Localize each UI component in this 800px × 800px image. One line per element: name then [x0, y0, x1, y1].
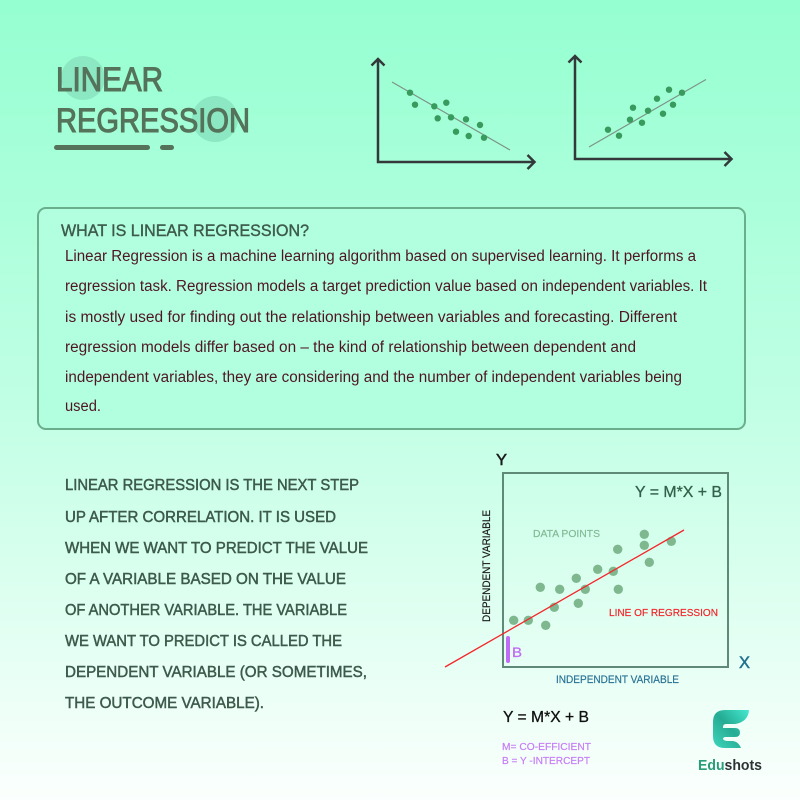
text block: explanation: UP AFTER CORRELATION. IT IS USED	[65, 509, 336, 526]
panel body text: regression models differ based on – the kind of relationship between dependent and	[65, 339, 636, 356]
text block: explanation: THE OUTCOME VARIABLE).	[65, 695, 264, 712]
panel body text: Linear Regression is a machine learning algorithm based on supervised learning. It performs a	[65, 248, 696, 265]
logo: edushots	[698, 710, 762, 774]
title: linear regression	[54, 56, 250, 150]
data points	[509, 530, 676, 630]
regression line	[445, 530, 684, 667]
text block: explanation: LINEAR REGRESSION IS THE NEXT STEP	[65, 477, 359, 494]
text block: explanation: WE WANT TO PREDICT IS CALLED THE	[65, 633, 342, 650]
text block: explanation: OF A VARIABLE BASED ON THE VALUE	[65, 571, 346, 588]
text block: explanation: DEPENDENT VARIABLE (OR SOMETIMES,	[65, 664, 367, 681]
chart: positive correlation scatter	[568, 56, 732, 166]
panel body text: used.	[65, 398, 101, 415]
panel body text	[65, 248, 708, 415]
chart: line of regression diagram	[445, 452, 750, 686]
chart: negative correlation scatter	[372, 59, 534, 169]
equation: Y = M*X + B	[503, 709, 589, 726]
title: linear regression: LINEAR	[56, 61, 163, 99]
plot frame	[503, 473, 728, 667]
label: independent variable: INDEPENDENT VARIABLE	[556, 674, 679, 686]
panel: what is linear regression	[38, 208, 745, 429]
axis label: x: X	[739, 653, 750, 672]
panel heading: WHAT IS LINEAR REGRESSION?	[61, 221, 309, 240]
legend: equation terms: B = Y -INTERCEPT	[502, 755, 591, 767]
text block: explanation: OF ANOTHER VARIABLE. THE VARIABLE	[65, 602, 347, 619]
logo mark	[713, 710, 749, 748]
panel body text: is mostly used for finding out the relationship between variables and forecasting. Different	[65, 309, 678, 326]
label: data points: DATA POINTS	[533, 528, 600, 540]
text block: explanation: WHEN WE WANT TO PREDICT THE VALUE	[65, 540, 368, 557]
label: dependent variable: DEPENDENT VARIABLE	[481, 510, 493, 622]
intercept marker b	[506, 636, 522, 663]
title: linear regression: REGRESSION	[56, 102, 250, 140]
legend: equation terms	[502, 741, 592, 767]
panel body text: independent variables, they are considering and the number of independent variables being	[65, 369, 682, 386]
logo wordmark: Edushots	[698, 758, 762, 774]
axis label: y: Y	[496, 452, 507, 469]
text block: explanation	[65, 477, 368, 712]
label: line of regression: LINE OF REGRESSION	[609, 607, 718, 619]
intercept marker b: B	[512, 644, 522, 660]
plot equation: Y = M*X + B	[635, 484, 722, 501]
panel body text: regression task. Regression models a target prediction value based on independent variables. It	[65, 278, 708, 295]
legend: equation terms: M= CO-EFFICIENT	[502, 741, 592, 753]
